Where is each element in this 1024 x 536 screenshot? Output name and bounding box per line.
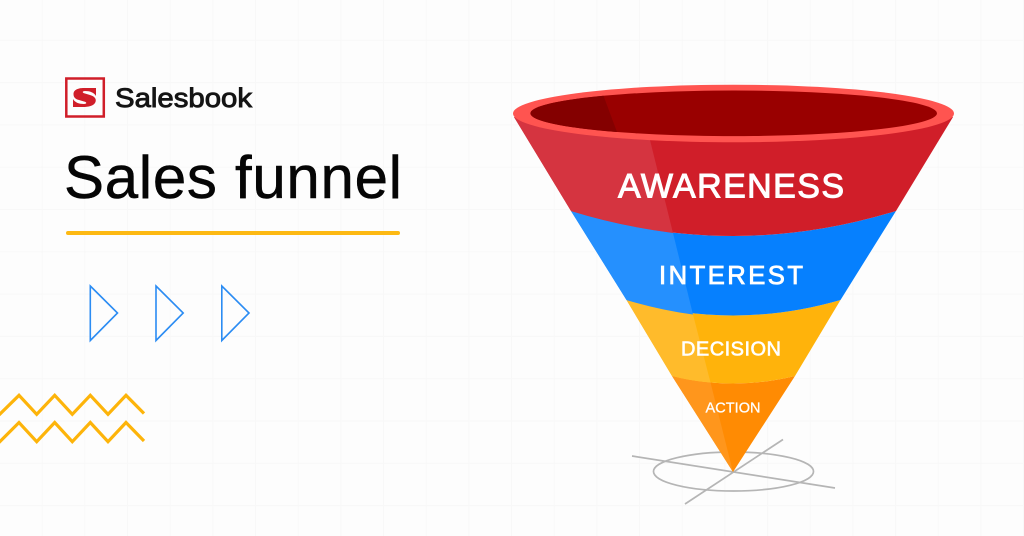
label: action: ACTION bbox=[706, 400, 760, 416]
label: interest: INTEREST bbox=[659, 262, 803, 290]
logo bbox=[66, 78, 253, 116]
arrow 3 bbox=[222, 286, 249, 340]
funnel opening bbox=[530, 90, 937, 136]
arrows: three outlined triangles bbox=[90, 286, 249, 340]
funnel bbox=[513, 85, 954, 472]
zigzag bottom bbox=[0, 422, 144, 442]
title underline bbox=[66, 231, 400, 235]
wordmark: Salesbook bbox=[115, 83, 253, 113]
icon: Salesbook logo mark bbox=[66, 78, 104, 116]
title: Sales funnel bbox=[64, 144, 402, 211]
funnel base: ellipse and axes bbox=[632, 440, 835, 504]
zigzag top bbox=[0, 395, 144, 415]
arrow 1 bbox=[90, 286, 118, 340]
band: decision bbox=[626, 300, 840, 384]
band: awareness bbox=[514, 117, 953, 236]
label: decision: DECISION bbox=[681, 339, 781, 361]
decorative zigzag lines bbox=[0, 395, 144, 442]
band: interest bbox=[571, 211, 896, 316]
funnel rim bbox=[513, 85, 954, 142]
arrow 2 bbox=[156, 286, 183, 340]
label: awareness: AWARENESS bbox=[618, 168, 844, 206]
band: action bbox=[672, 376, 795, 472]
